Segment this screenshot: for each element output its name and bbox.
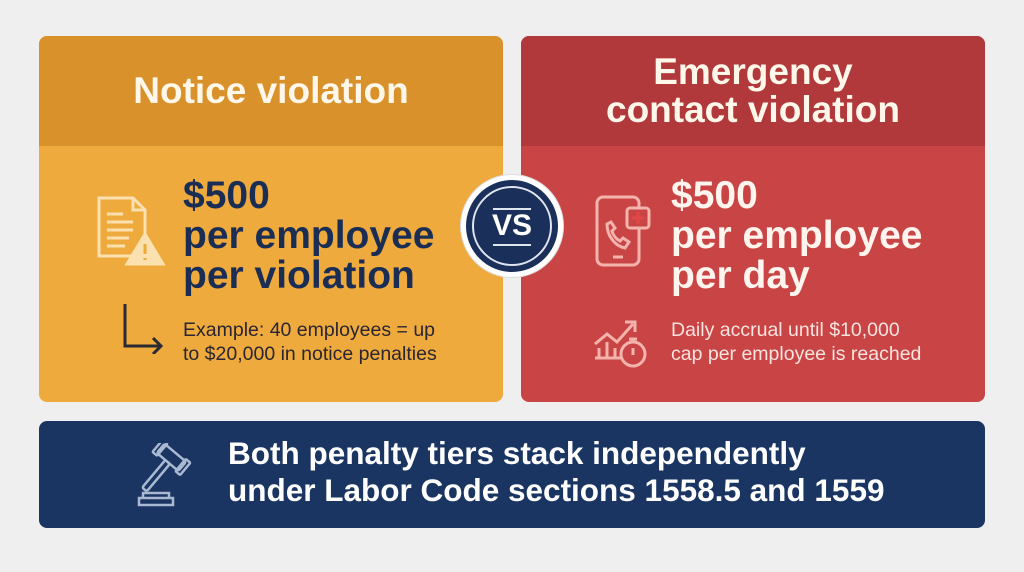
arrow: example: [124, 304, 163, 354]
text: example: Example: 40 employees = up: [183, 319, 435, 341]
icon: document warning: [98, 196, 166, 266]
text: example: to $20,000 in notice penalties: [183, 343, 437, 365]
text: $500 per employee per violation: $500: [183, 174, 270, 217]
text: $500 per employee per day: per day: [671, 254, 810, 297]
text: example: [183, 319, 437, 365]
text: summary: Both penalty tiers stack independently: [228, 435, 806, 471]
heading: notice violation: [39, 36, 503, 146]
text: daily accrual: Daily accrual until $10,000: [671, 319, 900, 341]
text: daily accrual: cap per employee is reached: [671, 343, 921, 365]
text: $500 per employee per day: per employee: [671, 214, 922, 257]
panel: bottom summary: [39, 421, 985, 528]
heading: emergency contact violation: contact violation: [606, 89, 900, 130]
text: $500 per employee per violation: per violation: [183, 254, 415, 297]
panel: notice violation: [39, 36, 503, 402]
heading: notice violation: Notice violation: [133, 70, 409, 111]
text: summary: [228, 435, 884, 508]
icon: chart stopwatch: [594, 320, 646, 368]
text: $500 per employee per day: $500: [671, 174, 758, 217]
text: $500 per employee per day: [671, 174, 922, 297]
icon: phone medical: [596, 196, 650, 266]
heading: emergency contact violation: [521, 36, 985, 146]
panel: emergency contact violation: [521, 36, 985, 402]
text: summary: under Labor Code sections 1558.5 and 1559: [228, 472, 884, 508]
text: $500 per employee per violation: per employee: [183, 214, 434, 257]
text: $500 per employee per violation: [183, 174, 434, 297]
icon: VS badge: [461, 175, 563, 277]
text: daily accrual: [671, 319, 921, 365]
icon: VS badge: VS: [492, 209, 532, 242]
icon: gavel: [138, 443, 192, 506]
heading: emergency contact violation: Emergency: [653, 51, 853, 92]
